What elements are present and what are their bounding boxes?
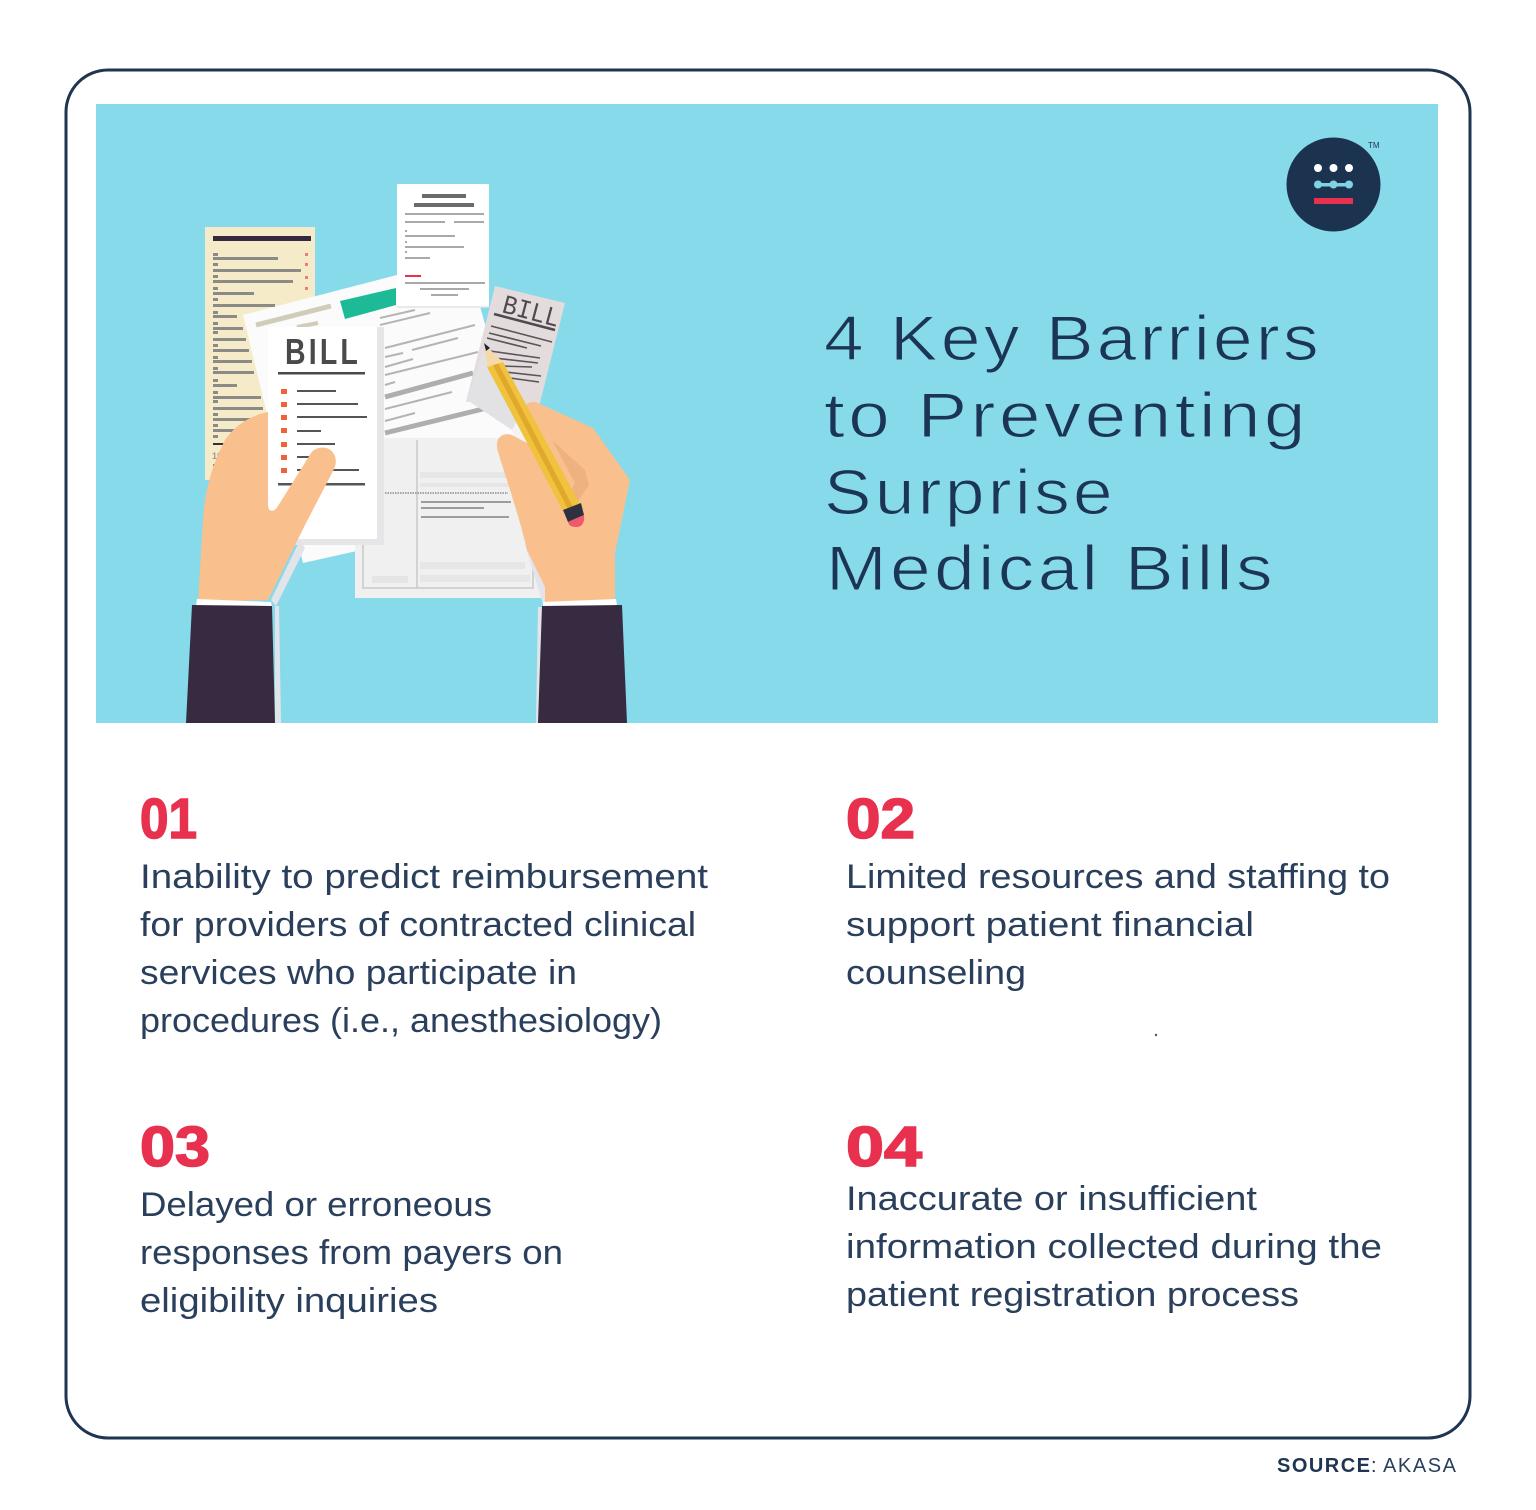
right cuff and sleeve	[538, 599, 627, 723]
cream receipt: 101	[212, 451, 227, 461]
barrier 01	[140, 787, 709, 1040]
source note: SOURCE	[1277, 1455, 1370, 1477]
barrier 02: 02	[846, 787, 915, 851]
title: Medical Bills	[826, 534, 1276, 604]
hand shadow	[552, 440, 589, 510]
barrier 04: information collected during the	[846, 1228, 1382, 1266]
cream receipt	[205, 227, 315, 480]
barrier 04: 04	[846, 1115, 922, 1179]
barrier 03	[140, 1115, 563, 1320]
main bill sheet: BILL	[285, 331, 361, 372]
title: to Preventing	[824, 381, 1309, 451]
title: 4 Key Barriers	[824, 304, 1322, 374]
small tilted bill	[466, 286, 565, 452]
source note: AKASA	[1383, 1455, 1457, 1477]
barrier 04	[846, 1115, 1382, 1314]
right hand	[497, 402, 630, 602]
barrier 03: 03	[140, 1115, 210, 1179]
barrier 03: Delayed or erroneous	[140, 1186, 492, 1224]
back white statement	[243, 257, 540, 563]
paper edges by the hands	[271, 540, 552, 723]
pencil	[484, 343, 584, 527]
barrier 03: eligibility inquiries	[140, 1282, 438, 1320]
lower form	[355, 438, 541, 598]
small tilted bill: BILL	[499, 292, 562, 336]
title: Surprise	[824, 458, 1116, 528]
left cuff and sleeve	[186, 599, 275, 723]
logo badge: TM	[1368, 141, 1380, 150]
barrier 01: procedures (i.e., anesthesiology)	[140, 1002, 662, 1040]
barrier 04: Inaccurate or insufficient	[846, 1180, 1258, 1218]
source note	[1277, 1455, 1457, 1477]
source note: :	[1371, 1455, 1377, 1477]
barrier 02: counseling	[846, 954, 1026, 992]
top white receipt	[397, 184, 489, 307]
panel: hero banner	[96, 104, 1438, 723]
illustration: hands holding bills	[186, 184, 630, 723]
barrier 01: Inability to predict reimbursement	[140, 858, 709, 896]
barrier 02	[846, 787, 1390, 992]
barrier 01: 01	[140, 787, 197, 851]
barrier 01: for providers of contracted clinical	[140, 906, 696, 944]
barrier 03: responses from payers on	[140, 1234, 563, 1272]
logo badge	[1286, 138, 1380, 232]
barrier 01: services who participate in	[140, 954, 577, 992]
left hand	[198, 412, 336, 602]
barrier 04: patient registration process	[846, 1276, 1299, 1314]
main bill sheet	[268, 327, 384, 545]
title	[824, 304, 1322, 604]
barrier 02: support patient financial	[846, 906, 1254, 944]
barrier 02: Limited resources and staffing to	[846, 858, 1390, 896]
